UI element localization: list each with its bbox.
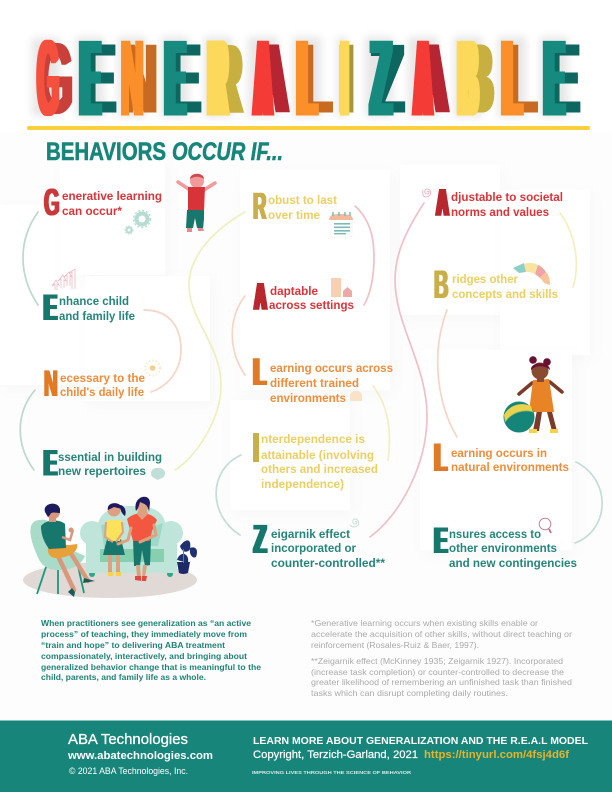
item: Ensures bbox=[434, 518, 577, 570]
footer: learn more: LEARN MORE ABOUT GENERALIZATION AND THE R.E.A.L MODEL bbox=[253, 735, 589, 747]
item: Adjustable: djustable to societal bbox=[451, 191, 563, 204]
letter fronts: G and N: G bbox=[37, 18, 59, 138]
footer: learn more: IMPROVING LIVES THROUGH THE SCIENCE OF BEHAVIOR bbox=[252, 770, 412, 776]
letter sides: Z bbox=[372, 23, 403, 134]
letter sides bbox=[81, 23, 578, 134]
item: Zeigarnik: Z bbox=[254, 516, 266, 562]
item: Learning natural: natural environments bbox=[451, 461, 569, 474]
text: footnotes: greater likelihood of remembering an unfinished task than finished bbox=[311, 677, 572, 687]
text: practitioner paragraph: When practitioners see generalization as “an active bbox=[41, 618, 251, 628]
letter fronts: G and N bbox=[37, 16, 143, 139]
icon: brain bubble bbox=[151, 468, 165, 480]
item: Interdependence bbox=[253, 433, 378, 491]
letter fronts: B bbox=[459, 16, 477, 139]
letter fronts: Z bbox=[372, 16, 390, 139]
mother bbox=[118, 497, 157, 581]
item: Interdependence: attainable (involving bbox=[261, 449, 374, 462]
footer: learn more: https://tinyurl.com/4fsj4d6f bbox=[424, 749, 569, 761]
letter sides: I bbox=[341, 23, 352, 133]
letter fronts: A bbox=[255, 17, 271, 139]
letter sides: A bbox=[255, 25, 287, 134]
letter sides: B bbox=[459, 26, 492, 134]
item: Bridges: concepts and skills bbox=[452, 288, 558, 301]
letter fronts: A bbox=[415, 17, 431, 139]
text: footnotes: reinforcement (Rosales-Ruiz & Baer, 1997). bbox=[311, 640, 479, 650]
item: Adaptable bbox=[254, 276, 354, 319]
item: Essential: ssential in building bbox=[58, 451, 162, 464]
footer band bbox=[0, 720, 612, 792]
yellow title rule bbox=[27, 126, 590, 130]
letter sides: R bbox=[209, 25, 241, 134]
item: Robust: obust to last bbox=[268, 194, 337, 207]
item: Zeigarnik: eigarnik effect bbox=[271, 528, 350, 541]
item: Learning across: earning occurs across bbox=[270, 362, 393, 375]
letter sides: E bbox=[545, 26, 578, 134]
item: Zeigarnik: incorporated or bbox=[271, 542, 356, 555]
child bbox=[103, 503, 126, 576]
item: Zeigarnik: counter-controlled** bbox=[271, 557, 385, 570]
footer: ABA contact: www.abatechnologies.com bbox=[67, 750, 213, 762]
item: Enhance child: E bbox=[44, 287, 57, 329]
icon: magnifier bbox=[539, 518, 551, 533]
item: Ensures: and new contingencies bbox=[449, 557, 577, 570]
item: Generative learning: enerative learning bbox=[62, 190, 162, 203]
item: Necessary: child's daily life bbox=[60, 386, 145, 399]
letter fronts bbox=[81, 16, 563, 139]
item: Adjustable: A bbox=[436, 182, 448, 225]
letter sides: G and N: N bbox=[121, 23, 158, 134]
illustration: girl with ball bbox=[504, 356, 562, 433]
letter sides: L bbox=[298, 24, 331, 134]
item: Necessary: ecessary to the bbox=[60, 372, 146, 385]
text: practitioner paragraph: generalized behavior change that is meaningful to the bbox=[41, 662, 261, 672]
subtitle bbox=[46, 138, 283, 166]
icon: gears bbox=[125, 210, 150, 234]
item: Interdependence: others and increased bbox=[261, 463, 378, 476]
text: footnotes: *Generative learning occurs when existing skills enable or bbox=[311, 618, 538, 628]
icon: swirl bbox=[423, 189, 431, 197]
footer: ABA contact: ABA Technologies bbox=[68, 731, 188, 748]
item: Enhance child: and family life bbox=[59, 310, 136, 323]
item: Robust bbox=[253, 186, 353, 237]
item: Adaptable: daptable bbox=[270, 285, 319, 298]
icon: buildings bbox=[331, 278, 352, 297]
item: Generative learning: G bbox=[44, 182, 60, 224]
illustration: cheering boy bbox=[178, 174, 215, 232]
item: Learning natural bbox=[434, 434, 569, 480]
item: Learning natural: earning occurs in bbox=[451, 447, 547, 460]
letter sides: G and N bbox=[38, 23, 158, 135]
footer: ABA contact bbox=[67, 731, 213, 776]
icon: rising arrows bbox=[52, 269, 75, 290]
letter fronts: E bbox=[166, 17, 184, 139]
letter sides: E bbox=[166, 26, 199, 134]
icon: calendar bbox=[329, 212, 353, 237]
item: Generative learning: can occur* bbox=[62, 205, 122, 218]
item: Necessary: N bbox=[44, 363, 58, 405]
item: Generative learning bbox=[44, 182, 162, 234]
text: practitioner paragraph: child, parents, and family life as a whole. bbox=[41, 672, 206, 682]
item: Interdependence: nterdependence is bbox=[261, 433, 365, 446]
text: practitioner paragraph: process” of teaching, they immediately move from bbox=[41, 629, 247, 639]
letter sides: A bbox=[415, 25, 447, 134]
footer: learn more bbox=[252, 735, 589, 776]
icon: sun bbox=[145, 360, 160, 376]
text: practitioner paragraph: “train and hope” to delivering ABA treatment bbox=[41, 640, 225, 650]
letter fronts: L bbox=[503, 17, 521, 139]
text: footnotes: **Zeigarnik effect (McKinney 1935; Zeigarnik 1927). Incorporated bbox=[311, 656, 563, 666]
item: Learning across: different trained bbox=[270, 377, 359, 390]
text: footnotes: accelerate the acquisition of other skills, without direct teaching or bbox=[311, 629, 572, 639]
illustration: family with therapist bbox=[23, 497, 197, 598]
icon: swirl bbox=[350, 519, 359, 527]
item: Learning across: environments bbox=[270, 392, 346, 405]
letter fronts: R bbox=[209, 16, 227, 139]
item: Essential: E bbox=[44, 443, 57, 484]
text: practitioner paragraph bbox=[41, 618, 261, 682]
therapist bbox=[30, 504, 95, 597]
item: Bridges: ridges other bbox=[452, 273, 518, 286]
text: footnotes: (increase task completion) or counter-controlled to decrease the bbox=[311, 667, 564, 677]
item: Learning across: L bbox=[254, 350, 266, 394]
item: Ensures: other environments bbox=[449, 542, 557, 555]
letter sides: E bbox=[81, 26, 114, 134]
item: Essential bbox=[44, 443, 165, 484]
icon: puzzle rainbow bbox=[513, 263, 550, 285]
letter fronts: L bbox=[298, 17, 316, 139]
item: Adaptable: across settings bbox=[269, 299, 354, 312]
sofa bbox=[80, 506, 183, 577]
item: Robust: over time bbox=[268, 209, 321, 222]
item: Zeigarnik bbox=[254, 516, 385, 570]
footer: learn more: Copyright, Terzich-Garland, 2021 bbox=[253, 749, 418, 761]
letter fronts: E bbox=[81, 17, 99, 139]
subtitle: OCCUR IF... bbox=[172, 138, 283, 166]
title: GENERALIZABLE 3D letters bbox=[32, 16, 578, 139]
plant bbox=[177, 540, 197, 574]
letter sides: L bbox=[503, 24, 536, 134]
letter fronts: I bbox=[343, 18, 346, 139]
letter fronts: G and N: N bbox=[121, 16, 143, 139]
letter fronts: E bbox=[545, 17, 563, 139]
item: Enhance child: nhance child bbox=[59, 295, 129, 308]
text: practitioner paragraph: compassionately, interactively, and bringing about bbox=[41, 651, 247, 661]
text: footnotes bbox=[311, 618, 572, 698]
title shadow bbox=[32, 37, 568, 117]
item: Learning natural: L bbox=[434, 434, 447, 480]
item: Bridges bbox=[434, 261, 558, 307]
item: Necessary bbox=[44, 360, 160, 405]
item: Bridges: B bbox=[434, 261, 448, 307]
item: Adjustable bbox=[423, 182, 563, 225]
item: Adaptable: A bbox=[254, 276, 266, 319]
item: Adjustable: norms and values bbox=[451, 206, 549, 219]
item: Interdependence: independence) bbox=[261, 478, 344, 491]
item: Ensures: nsures access to bbox=[449, 528, 541, 541]
item: Ensures: E bbox=[434, 520, 447, 562]
item: Learning across bbox=[254, 350, 393, 405]
item: Enhance child bbox=[44, 269, 136, 329]
connecting arcs bbox=[20, 203, 602, 543]
footer: ABA contact: © 2021 ABA Technologies, Inc. bbox=[69, 766, 188, 776]
icon: house arch bbox=[350, 391, 362, 401]
letter sides: G and N: G bbox=[38, 24, 73, 135]
subtitle: BEHAVIORS bbox=[46, 138, 166, 166]
item: Robust: R bbox=[253, 186, 266, 228]
item: Essential: new repertoires bbox=[58, 465, 146, 478]
text: footnotes: tasks which can disrupt completing daily routines. bbox=[311, 688, 508, 698]
